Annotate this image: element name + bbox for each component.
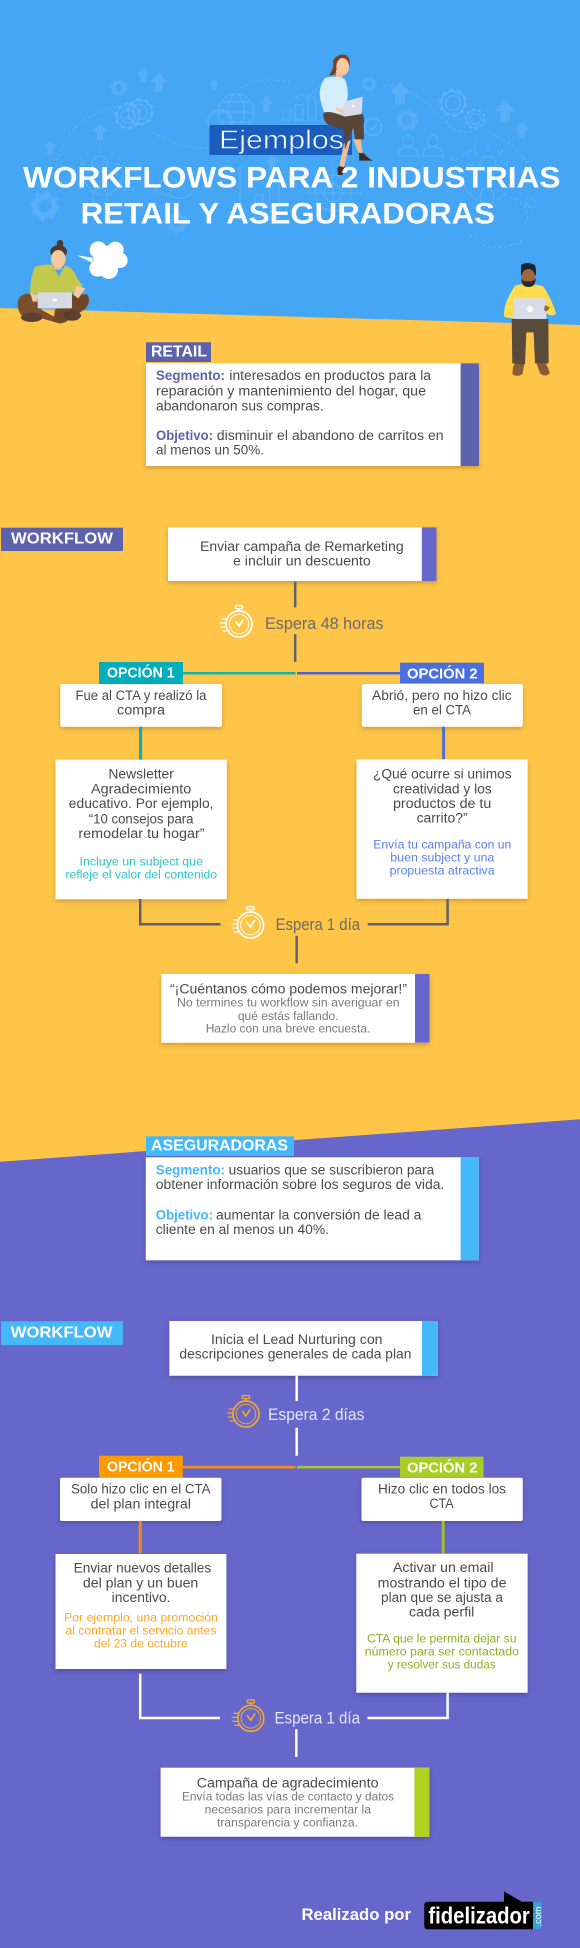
panel: new plan details: del plan y un buen — [83, 1575, 198, 1590]
step: lead nurturing — [169, 1321, 438, 1376]
panel: insurers segment and objective: Segmento: — [156, 1162, 225, 1177]
panel: option 2 condition: Abrió, pero no hizo clic — [372, 688, 512, 703]
panel: option 2 insurers condition: CTA — [430, 1496, 454, 1511]
panel: new plan details: incentivo. — [112, 1590, 170, 1605]
panel: insurers segment and objective — [146, 1157, 479, 1260]
panel: retail segment and objective: Segmento: — [156, 368, 225, 383]
connector: merge lines retail — [140, 899, 448, 963]
panel: new plan details — [56, 1554, 226, 1669]
connector line — [294, 582, 296, 662]
panel: creativity question: creatividad y los — [393, 781, 492, 796]
panel: survey: qué estás fallando. — [238, 1009, 338, 1023]
panel: thank-you campaign — [161, 1768, 430, 1837]
panel: option 1 condition: compra — [117, 703, 166, 718]
panel: newsletter: educativo. Por ejemplo, — [69, 796, 214, 811]
panel: survey: No termines tu workflow sin averiguar en — [177, 996, 400, 1010]
connector: option lines insurers — [140, 1521, 443, 1554]
panel: retail segment and objective: interesados en productos para la — [229, 368, 432, 383]
panel: profile email: plan que se ajusta a — [381, 1590, 504, 1605]
connector: merge lines insurers — [140, 1674, 448, 1757]
panel: insurers segment and objective: usuarios que se suscribieron para — [229, 1162, 435, 1177]
panel: creativity question: buen subject y una — [390, 850, 494, 864]
step: remarketing campaign: Enviar campaña de Remarketing — [200, 539, 404, 554]
panel: profile email: cada perfil — [409, 1605, 474, 1620]
section tag: WORKFLOW retail — [1, 528, 123, 551]
tag: option 2 insurers: OPCIÓN 2 — [407, 1459, 477, 1477]
panel: survey: “¡Cuéntanos cómo podemos mejorar!” — [170, 981, 407, 996]
panel: profile email: CTA que le permita dejar su — [367, 1631, 517, 1645]
panel: creativity question: propuesta atractiva — [390, 863, 495, 877]
panel: option 2 condition — [362, 684, 523, 727]
panel: creativity question: ¿Qué ocurre si unimos — [373, 766, 512, 781]
illustration: woman with laptop — [320, 55, 373, 175]
panel: new plan details: Por ejemplo, una promoción — [64, 1610, 218, 1624]
panel: creativity question: productos de tu — [393, 796, 491, 811]
step: lead nurturing: Inicia el Lead Nurturing con — [211, 1332, 382, 1347]
panel: newsletter: “10 consejos para — [89, 811, 194, 826]
panel: creativity question: Envía tu campaña con un — [373, 837, 511, 851]
panel: option 2 insurers condition — [362, 1478, 523, 1521]
panel: option 1 insurers condition — [60, 1478, 222, 1521]
panel: option 2 insurers condition: Hizo clic en todos los — [378, 1481, 506, 1496]
panel: new plan details: Enviar nuevos detalles — [74, 1561, 212, 1576]
section tag: WORKFLOW retail: WORKFLOW — [11, 530, 113, 547]
panel: insurers segment and objective: obtener información sobre los seguros de vida. — [156, 1177, 444, 1192]
logo: fidelizador: .com — [533, 1906, 543, 1926]
logo: fidelizador — [424, 1892, 543, 1929]
section tag: RETAIL: RETAIL — [151, 344, 207, 361]
panel: retail segment and objective: disminuir el abandono de carritos en — [217, 428, 444, 443]
panel: profile email: y resolver sus dudas — [388, 1658, 496, 1672]
icon: stopwatch — [220, 606, 252, 637]
tag: option 1 insurers: OPCIÓN 1 — [107, 1458, 175, 1476]
section tag: ASEGURADORAS: ASEGURADORAS — [151, 1138, 288, 1155]
panel: retail segment and objective: abandonaron sus compras. — [156, 399, 324, 414]
panel: profile email: número para ser contactado — [365, 1645, 519, 1659]
icon: stopwatch — [232, 1700, 264, 1731]
panel: option 1 insurers condition: del plan integral — [91, 1496, 191, 1511]
panel: thank-you campaign: Envía todas las vías de contacto y datos — [182, 1790, 394, 1804]
panel: retail segment and objective: reparación y mantenimiento del hogar, que — [156, 384, 426, 399]
panel: retail segment and objective: al menos un 50%. — [156, 443, 264, 458]
logo: fidelizador: fidelizador — [428, 1902, 530, 1928]
panel: new plan details: al contratar el servicio antes — [66, 1623, 216, 1637]
panel: thank-you campaign: Campaña de agradecimiento — [197, 1775, 378, 1790]
illustration: man sitting cross-legged with laptop — [18, 240, 89, 324]
footer credit: Realizado por — [302, 1906, 412, 1924]
section tag: WORKFLOW insurers: WORKFLOW — [11, 1324, 113, 1341]
panel: newsletter: Incluye un subject que — [80, 854, 203, 868]
label: wait 48 hours: Espera 48 horas — [265, 614, 384, 633]
panel: insurers segment and objective: aumentar la conversión de lead a — [216, 1207, 422, 1222]
panel: newsletter: refleje el valor del contenido — [66, 867, 217, 881]
background: blue header — [0, 0, 580, 340]
step: remarketing campaign: e incluir un descuento — [233, 554, 371, 569]
panel: profile email: mostrando el tipo de — [378, 1575, 506, 1590]
connector line insurers — [295, 1376, 298, 1456]
icon: stopwatch — [232, 907, 264, 938]
speech bubble — [77, 241, 128, 279]
panel: profile email: Activar un email — [393, 1560, 494, 1575]
panel: insurers segment and objective: cliente en al menos un 40%. — [156, 1222, 329, 1237]
panel: thank-you campaign: transparencia y confianza. — [217, 1816, 358, 1830]
branch lines retail — [183, 672, 400, 675]
panel: option 1 condition: Fue al CTA y realizó la — [76, 688, 207, 703]
main title — [23, 161, 560, 230]
panel: survey — [161, 974, 430, 1043]
main title: WORKFLOWS PARA 2 INDUSTRIAS — [23, 161, 560, 194]
connector: option lines retail — [141, 727, 444, 760]
background: purple insurers section — [0, 1119, 580, 1948]
panel: survey: Hazlo con una breve encuesta. — [206, 1021, 370, 1035]
panel: creativity question — [357, 759, 528, 899]
tag: option 1 retail — [99, 662, 183, 684]
panel: newsletter: remodelar tu hogar” — [78, 826, 205, 841]
step: remarketing campaign — [168, 527, 436, 581]
branch lines insurers — [183, 1466, 400, 1469]
panel: insurers segment and objective: Objetivo: — [156, 1207, 213, 1222]
panel: option 2 condition: en el CTA — [413, 703, 471, 718]
title tag: Ejemplos: Ejemplos — [219, 124, 344, 154]
label: wait 1 day insurers: Espera 1 día — [274, 1708, 360, 1727]
main title: RETAIL Y ASEGURADORAS — [81, 197, 495, 230]
tag: option 2 retail: OPCIÓN 2 — [407, 664, 478, 682]
panel: newsletter: Agradecimiento — [91, 781, 191, 796]
panel: option 1 insurers condition: Solo hizo clic en el CTA — [71, 1481, 211, 1496]
panel: profile email — [356, 1554, 528, 1693]
tag: option 1 retail: OPCIÓN 1 — [107, 664, 175, 682]
step: lead nurturing: descripciones generales de cada plan — [179, 1347, 411, 1362]
illustration: man with beard and laptop — [504, 263, 556, 376]
panel: retail segment and objective: Objetivo: — [156, 428, 213, 443]
label: wait 2 days: Espera 2 días — [268, 1405, 364, 1424]
background: yellow retail section — [0, 308, 580, 1165]
panel: newsletter: Newsletter — [108, 766, 174, 781]
panel: thank-you campaign: necesarios para incrementar la — [205, 1802, 371, 1816]
decorative business icons behind the title — [32, 68, 536, 248]
panel: newsletter — [56, 760, 227, 899]
tag: option 1 insurers — [99, 1456, 183, 1478]
panel: new plan details: del 23 de octubre — [94, 1636, 188, 1650]
panel: creativity question: carrito?” — [417, 811, 468, 826]
panel: option 1 condition — [60, 684, 222, 727]
panel: retail segment and objective — [146, 363, 479, 466]
label: wait 1 day: Espera 1 día — [276, 915, 360, 934]
section tag: WORKFLOW insurers — [1, 1321, 123, 1345]
icon: stopwatch — [228, 1396, 259, 1427]
